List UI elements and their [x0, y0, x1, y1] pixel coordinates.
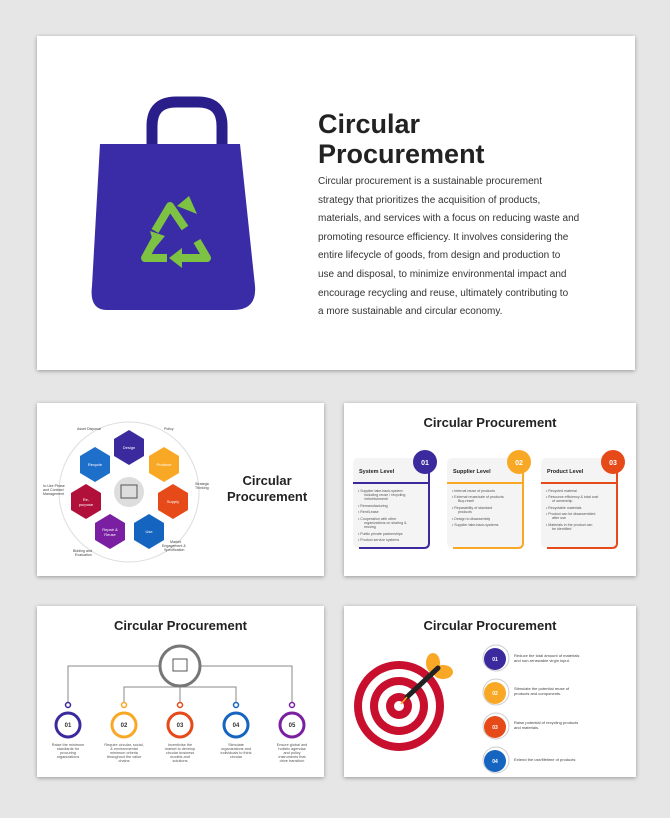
title: Circular Procurement: [114, 618, 247, 633]
chart: hexagon cycle: Produce: [157, 462, 172, 467]
text block: description: strategy that prioritizes the acquisition of products,: [318, 195, 540, 206]
list items: Raise potential of recycling products: [514, 720, 578, 725]
list items: Reduce the total amount of materials: [514, 653, 579, 658]
cards: • Supplier take-back-systems: [452, 523, 499, 527]
diagram: hub and steps: and policy: [283, 751, 301, 755]
diagram: hub and steps: minimum criteria: [110, 751, 139, 755]
diagram: hub and steps: Require circular, social,: [104, 743, 144, 747]
cards: including reuse / recycling: [364, 493, 405, 497]
title: [227, 473, 308, 504]
diagram: hub and steps: organizations: [57, 755, 79, 759]
diagram: hub and steps: Raise the minimum: [52, 743, 84, 747]
diagram: hub and steps: Incentivise the: [168, 743, 192, 747]
chart: hexagon cycle: Market: [170, 540, 181, 544]
chart: hexagon cycle: Policy: [164, 427, 174, 431]
title: [318, 109, 485, 169]
diagram: hub and steps: throughout the value: [107, 755, 141, 759]
diagram: hub and steps: [52, 644, 307, 763]
cards: • Product service systems: [358, 538, 399, 542]
text block: description: entire lifecycle of goods, from design and production to: [318, 250, 560, 261]
cards: Buy-resell: [458, 499, 474, 503]
cards: • Public private partnerships: [358, 532, 403, 536]
chart: hexagon cycle: Recycle: [88, 462, 103, 467]
text block: description: [318, 176, 579, 317]
chart: hexagon cycle: and Contract: [43, 488, 64, 492]
diagram: hub and steps: drive transition: [280, 759, 304, 763]
chart: hexagon cycle: purpose: [79, 502, 94, 507]
cards: /refurbishment/: [364, 497, 388, 501]
cards: products: [458, 510, 472, 514]
chart: hexagon cycle: Evaluation: [75, 553, 92, 557]
list items: and non-renewable virgin input.: [514, 658, 570, 663]
text block: description: materials, and services with a focus on reducing waste and: [318, 213, 579, 224]
chart: hexagon cycle: Asset Disposal: [77, 427, 101, 431]
cards: • Rent/Lease: [358, 510, 379, 514]
chart: hexagon cycle: Strategic: [195, 482, 209, 486]
diagram: hub and steps: Ensure global and: [277, 743, 307, 747]
title: Procurement: [318, 139, 485, 169]
cards: • Cooperation with other: [358, 517, 397, 521]
cards: organizations on sharing &: [364, 521, 407, 525]
chart: hexagon cycle: Use: [145, 529, 153, 534]
cards: • Design to disassembly: [452, 517, 490, 521]
title: Circular Procurement: [424, 618, 556, 633]
diagram: hub and steps: 05: [289, 723, 296, 729]
cards: 03: [609, 460, 617, 467]
icon: shopping bag with recycle: [92, 96, 256, 310]
title: Procurement: [227, 489, 307, 504]
diagram: hub and steps: standards for: [57, 747, 80, 751]
list items: Extend the use/lifetime of products: [514, 757, 575, 762]
diagram: hub and steps: holistic agendas: [278, 747, 306, 751]
icon: target with dart: [354, 644, 580, 774]
cards: • Recycled material: [546, 489, 577, 493]
chart: hexagon cycle: Repair &: [102, 527, 118, 532]
diagram: hub and steps: individuals to think: [220, 751, 252, 755]
panel: target slide: [344, 606, 636, 777]
diagram: hub and steps: solutions: [172, 759, 188, 763]
cards: • Remanufacturing: [358, 504, 388, 508]
diagram: hub and steps: Stimulate: [228, 743, 244, 747]
cards: • Supplier take-back-system: [358, 489, 403, 493]
cards: [353, 450, 625, 549]
chart: hexagon cycle: Engagement &: [162, 544, 186, 548]
chart: hexagon cycle: Management: [43, 492, 64, 496]
cards: Supplier Level: [453, 469, 491, 475]
list items: 03: [492, 725, 498, 731]
cards: • Recyclable materials: [546, 506, 582, 510]
chart: hexagon cycle: Thinking: [195, 486, 209, 490]
title: Circular: [318, 109, 420, 139]
cards: • Resource efficiency & total cost: [546, 495, 598, 499]
title: Circular Procurement: [424, 415, 556, 430]
diagram: hub and steps: chains: [119, 759, 130, 763]
cards: Product Level: [547, 469, 584, 475]
cards: reusing: [364, 525, 376, 529]
chart: hexagon cycle: Specification: [164, 548, 184, 552]
text block: description: promoting resource efficiency. It involves considering the: [318, 232, 568, 243]
diagram: hub and steps: market to develop: [165, 747, 195, 751]
panel: hexagon cycle slide: [37, 403, 324, 576]
cards: • Materials in the product can: [546, 523, 592, 527]
chart: hexagon cycle: Bidding and: [73, 549, 92, 553]
list items: 04: [492, 759, 498, 765]
text block: description: encourage recycling and reuse, ultimately contributing to: [318, 288, 568, 299]
panel: five steps slide: [37, 606, 324, 777]
panel: main slide: [37, 36, 635, 370]
diagram: hub and steps: 03: [177, 723, 184, 729]
chart: hexagon cycle: [43, 422, 209, 562]
diagram: hub and steps: models and: [170, 755, 190, 759]
list items: and materials.: [514, 725, 539, 730]
panel: levels slide: [344, 403, 636, 576]
chart: hexagon cycle: Design: [123, 445, 135, 450]
cards: System Level: [359, 469, 395, 475]
cards: 01: [421, 460, 429, 467]
text block: description: use and disposal, to minimize environmental impact and: [318, 269, 566, 280]
chart: hexagon cycle: In-Use Phase: [43, 484, 65, 488]
diagram: hub and steps: circular business: [166, 751, 194, 755]
diagram: hub and steps: procuring: [60, 751, 76, 755]
chart: hexagon cycle: Reuse: [104, 532, 117, 537]
list items: [483, 645, 579, 773]
cards: of ownership: [552, 499, 572, 503]
text block: description: Circular procurement is a sustainable procurement: [318, 176, 542, 187]
cards: 02: [515, 460, 523, 467]
list items: Stimulate the potential reuse of: [514, 686, 570, 691]
cards: after use: [552, 516, 566, 520]
list items: 02: [492, 691, 498, 697]
diagram: hub and steps: circular: [230, 755, 243, 759]
list items: 01: [492, 657, 498, 663]
diagram: hub and steps: organizations and: [221, 747, 251, 751]
list items: products and components.: [514, 691, 561, 696]
text block: description: a more sustainable and circular economy.: [318, 306, 502, 317]
diagram: hub and steps: 01: [65, 723, 72, 729]
cards: • External reuse/sale of products: [452, 495, 504, 499]
diagram: hub and steps: instruments that: [278, 755, 306, 759]
cards: • Reparability of standard: [452, 506, 492, 510]
diagram: hub and steps: & environmental: [110, 747, 138, 751]
cards: be identified: [552, 527, 571, 531]
chart: hexagon cycle: Re-: [83, 497, 90, 502]
diagram: hub and steps: 04: [233, 723, 240, 729]
cards: • Internal reuse of products: [452, 489, 495, 493]
title: Circular: [243, 473, 292, 488]
chart: hexagon cycle: Supply: [167, 499, 179, 504]
cards: • Product can be disassembled: [546, 512, 595, 516]
diagram: hub and steps: 02: [121, 723, 128, 729]
